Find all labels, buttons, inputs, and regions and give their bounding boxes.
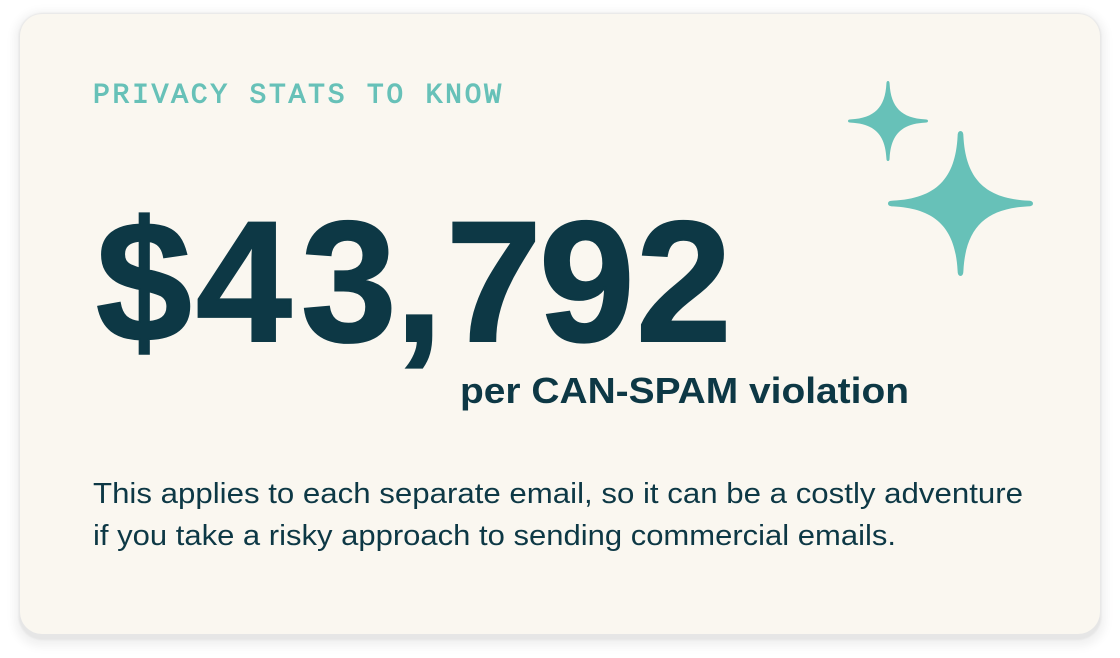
icon: large sparkle [888,131,1033,276]
stat caption: per CAN-SPAM violation: per CAN-SPAM violation [460,370,909,411]
heading: privacy stats to know: PRIVACY STATS TO KNOW [93,80,501,112]
big stat: $43,792: $43,792 [96,186,732,378]
icon: small sparkle [848,81,928,161]
body text [93,478,1023,552]
body text: if you take a risky approach to sending commercial emails. [93,520,896,552]
body text: This applies to each separate email, so it can be a costly adventure [93,478,1023,510]
